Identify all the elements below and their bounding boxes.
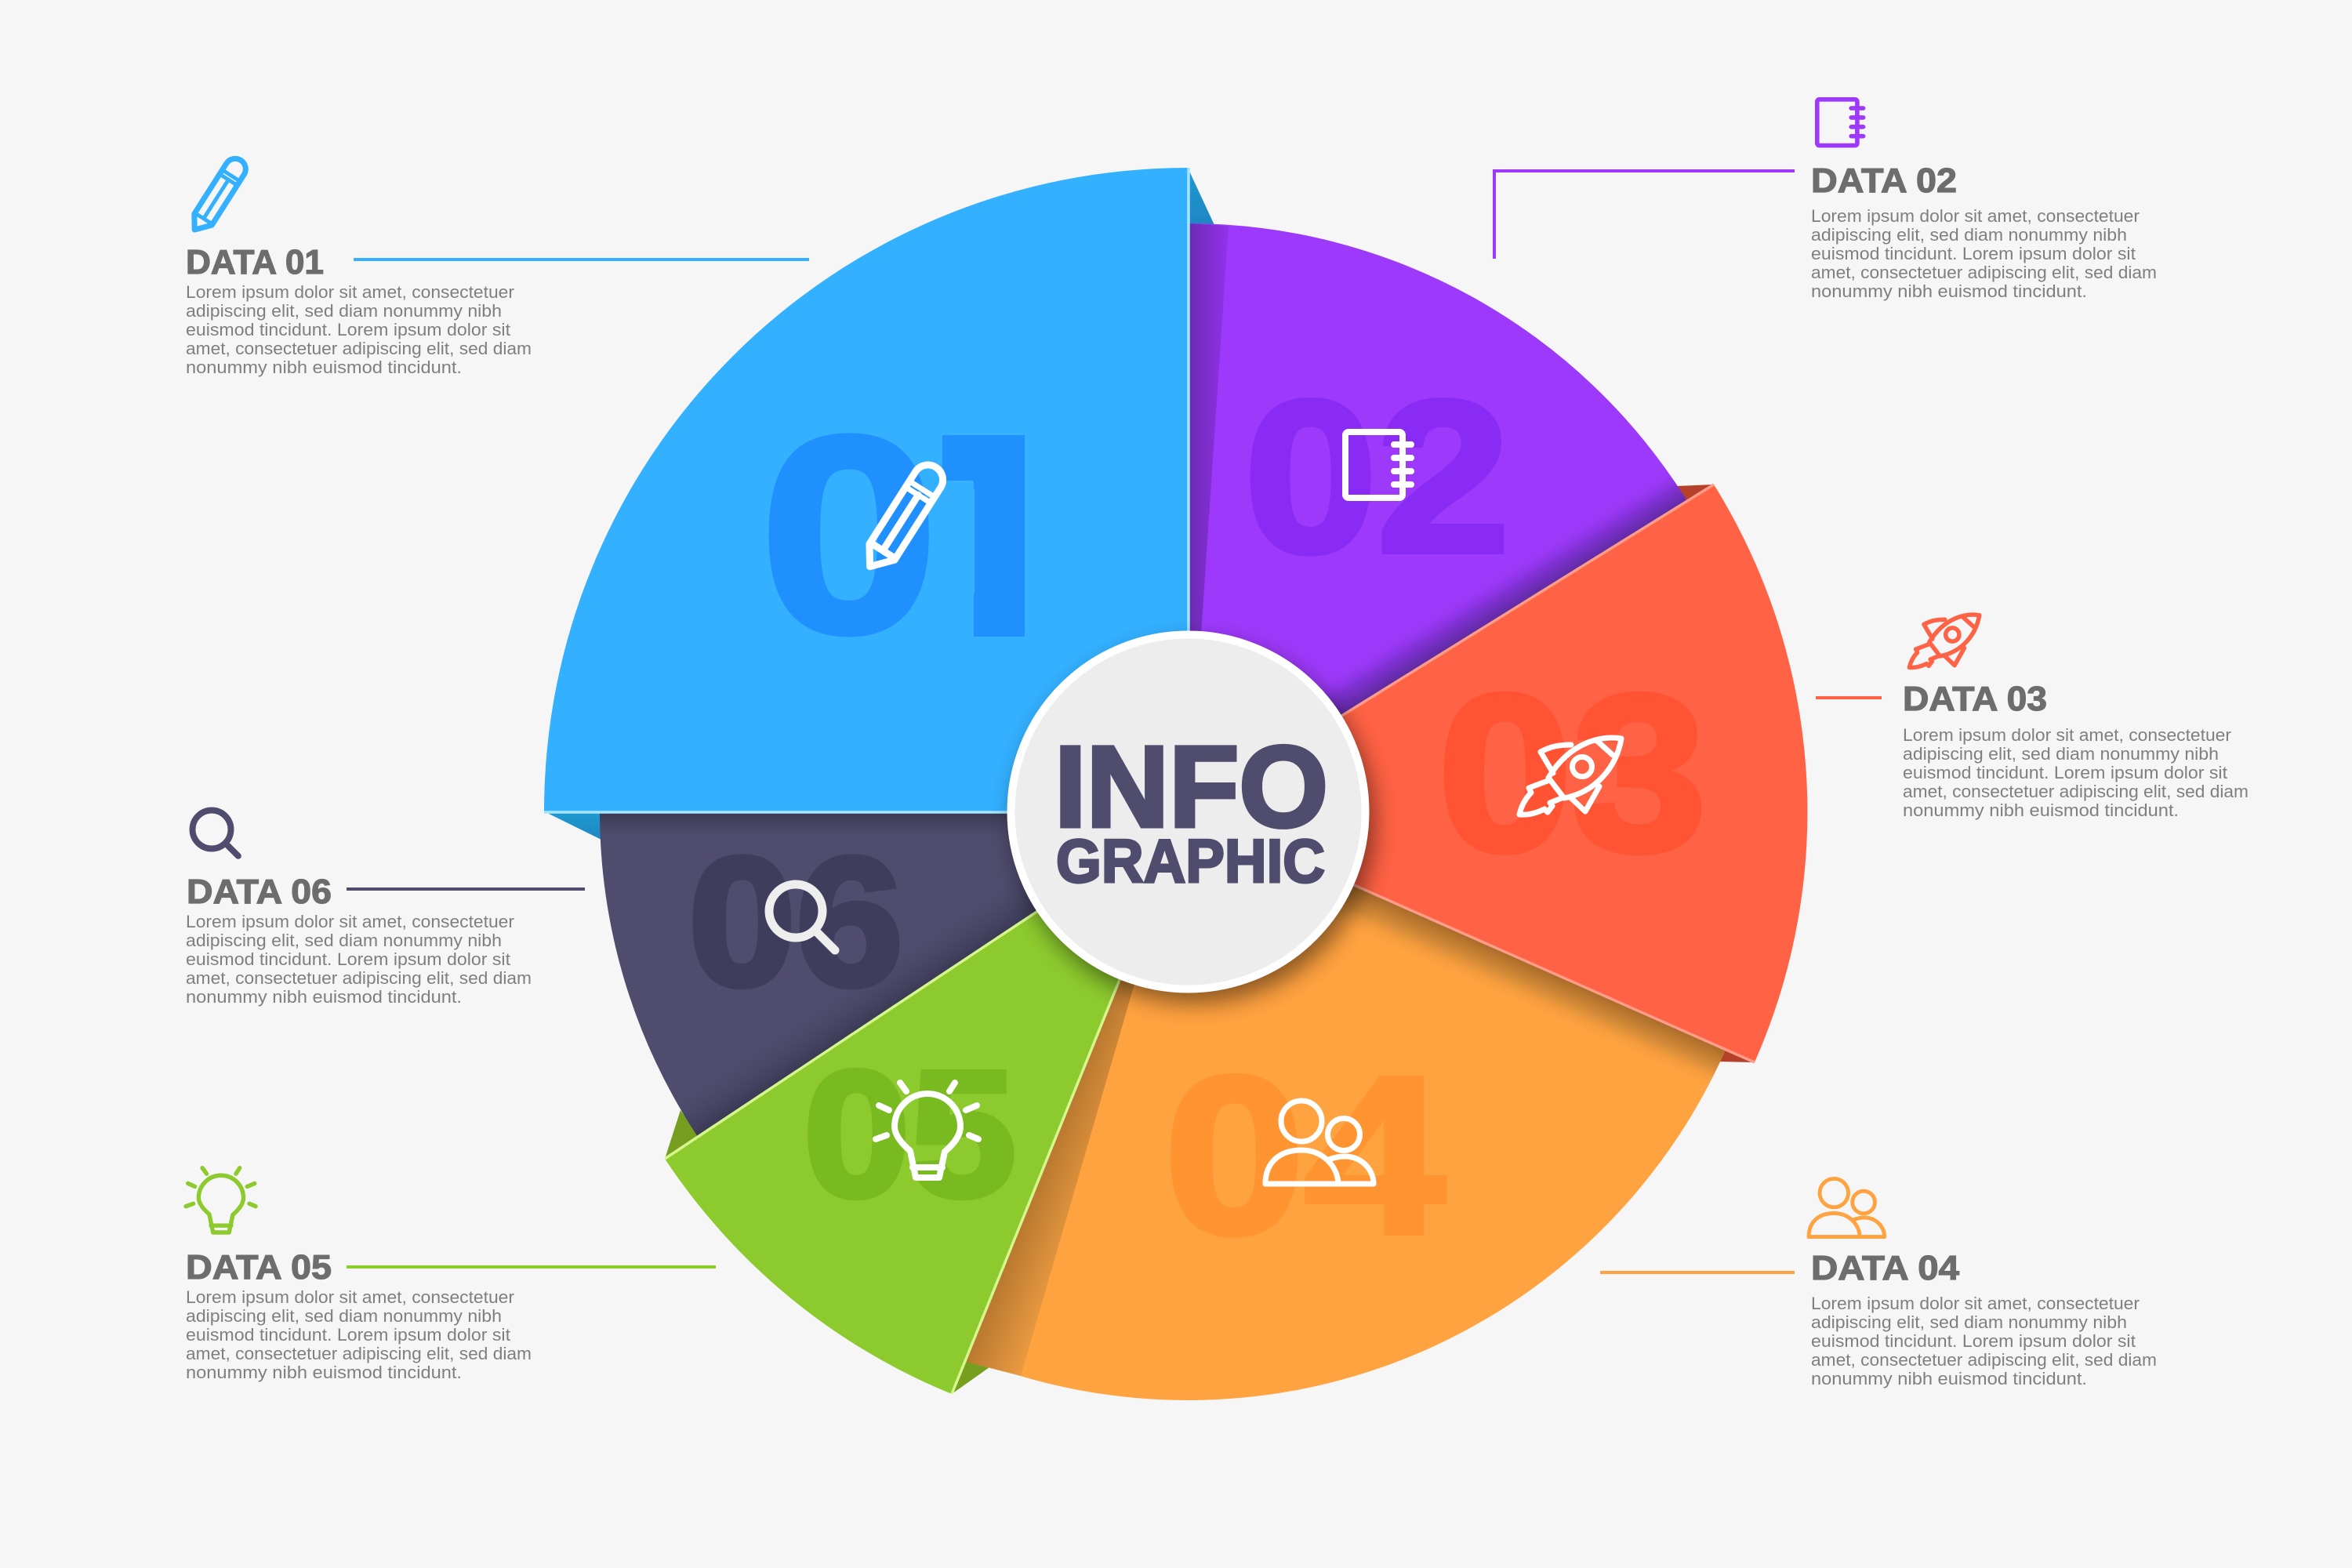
fold: red top [1676, 485, 1714, 503]
body text [1903, 725, 2249, 820]
body text: euismod tincidunt. Lorem ipsum dolor sit [186, 320, 510, 339]
body text: amet, consectetuer adipiscing elit, sed diam [186, 968, 532, 988]
panel: data 01 [186, 154, 809, 377]
body text [1811, 206, 2157, 301]
connector line [1600, 1271, 1795, 1274]
slice 04 edge shade [967, 811, 1726, 1400]
body text: Lorem ipsum dolor sit amet, consectetuer [186, 1287, 514, 1307]
panel: data 05 [186, 1168, 716, 1382]
body text: amet, consectetuer adipiscing elit, sed diam [186, 339, 532, 358]
heading: DATA 04 [1811, 1249, 1960, 1287]
icon: white notebook [1345, 432, 1411, 498]
pie chart [544, 168, 1807, 1400]
body text: Lorem ipsum dolor sit amet, consectetuer [1811, 1294, 2140, 1313]
connector line [347, 1265, 716, 1269]
icon: green bulb [186, 1168, 256, 1232]
number 01: 1 [919, 379, 1074, 691]
body text: euismod tincidunt. Lorem ipsum dolor sit [1903, 763, 2227, 782]
slice 05 green [665, 811, 1188, 1394]
body text: adipiscing elit, sed diam nonummy nibh [186, 931, 502, 950]
body text: amet, consectetuer adipiscing elit, sed diam [1811, 1350, 2157, 1370]
circle ring [1011, 635, 1366, 989]
body text: amet, consectetuer adipiscing elit, sed diam [186, 1344, 532, 1363]
connector line [354, 258, 809, 261]
fold: green top [665, 1110, 699, 1159]
body text: nonummy nibh euismod tincidunt. [1811, 281, 2087, 301]
body text: Lorem ipsum dolor sit amet, consectetuer [1811, 206, 2140, 226]
number 06: 06 [688, 820, 903, 1024]
connector line [1816, 696, 1882, 699]
body text: nonummy nibh euismod tincidunt. [186, 987, 462, 1007]
number 03: 03 [1438, 649, 1707, 898]
body text: Lorem ipsum dolor sit amet, consectetuer [186, 282, 514, 302]
title INFO: INFO [1054, 723, 1328, 851]
slice 02 left shade [1188, 223, 1229, 635]
number 01 [768, 433, 1025, 637]
body text: nonummy nibh euismod tincidunt. [186, 358, 462, 377]
fold: red bottom [1715, 1048, 1755, 1062]
body text: Lorem ipsum dolor sit amet, consectetuer [1903, 725, 2231, 745]
body text [186, 282, 532, 377]
body text: adipiscing elit, sed diam nonummy nibh [186, 1306, 502, 1326]
icon: dark magnifier [193, 811, 238, 856]
icon: purple notebook [1817, 100, 1864, 146]
number 01: 0 [760, 379, 938, 691]
body text [1811, 1294, 2157, 1388]
icon: white magnifier [769, 884, 835, 950]
body text [186, 912, 532, 1007]
body text: euismod tincidunt. Lorem ipsum dolor sit [186, 1325, 510, 1345]
body text: amet, consectetuer adipiscing elit, sed diam [1811, 263, 2157, 282]
body text: adipiscing elit, sed diam nonummy nibh [1811, 225, 2127, 245]
slice 03 red [1188, 485, 1807, 1062]
number 04: 04 [1164, 1031, 1446, 1280]
number 02: 02 [1244, 357, 1510, 597]
icon: white pencil [859, 459, 949, 575]
fold: blue top [1188, 168, 1214, 225]
slice 04 left shade [960, 980, 1134, 1376]
heading: DATA 01 [186, 243, 324, 281]
body text: Lorem ipsum dolor sit amet, consectetuer [186, 912, 514, 931]
slice 02 edge shade [1188, 223, 1687, 811]
body text: adipiscing elit, sed diam nonummy nibh [186, 301, 502, 321]
icon: blue pencil [187, 154, 249, 236]
heading: DATA 06 [187, 873, 332, 911]
panel: data 03 [1816, 615, 2249, 820]
connector line [1494, 171, 1795, 259]
icon: white rocket [1519, 738, 1621, 815]
panel: data 06 [186, 811, 585, 1007]
slice 02 purple [1188, 223, 1687, 811]
body text: euismod tincidunt. Lorem ipsum dolor sit [1811, 1331, 2136, 1351]
slice 06 dark [600, 811, 1188, 1137]
body text: euismod tincidunt. Lorem ipsum dolor sit [186, 949, 510, 969]
body text: nonummy nibh euismod tincidunt. [1811, 1369, 2087, 1388]
body text: euismod tincidunt. Lorem ipsum dolor sit [1811, 244, 2136, 263]
circle shadow [1013, 641, 1375, 1004]
body text: nonummy nibh euismod tincidunt. [186, 1363, 462, 1382]
slice 04 orange [967, 811, 1726, 1400]
fold: green bottom [952, 1355, 989, 1394]
body text: adipiscing elit, sed diam nonummy nibh [1903, 744, 2219, 764]
center circle [1011, 635, 1375, 1004]
title GRAPHIC: GRAPHIC [1056, 826, 1325, 895]
icon: white bulb [876, 1083, 978, 1178]
body text: amet, consectetuer adipiscing elit, sed diam [1903, 782, 2249, 801]
slice edge highlights [544, 168, 1755, 1394]
slice 01 blue [544, 168, 1188, 811]
fold: blue bottom [544, 811, 601, 840]
heading: DATA 03 [1903, 680, 2047, 718]
icon: orange people [1809, 1178, 1885, 1237]
panel: data 02 [1494, 100, 2157, 301]
icon: white people [1265, 1101, 1374, 1184]
heading: DATA 05 [186, 1248, 332, 1287]
panel: data 04 [1600, 1178, 2157, 1388]
slice 06 top shade [600, 811, 1188, 1137]
connector line [347, 887, 585, 891]
body text: nonummy nibh euismod tincidunt. [1903, 800, 2179, 820]
icon: red rocket [1909, 615, 1980, 667]
number 05: 05 [804, 1035, 1016, 1234]
heading: DATA 02 [1811, 162, 1957, 200]
slice 06 edge shade [600, 811, 1188, 1137]
body text: adipiscing elit, sed diam nonummy nibh [1811, 1312, 2127, 1332]
body text [186, 1287, 532, 1382]
